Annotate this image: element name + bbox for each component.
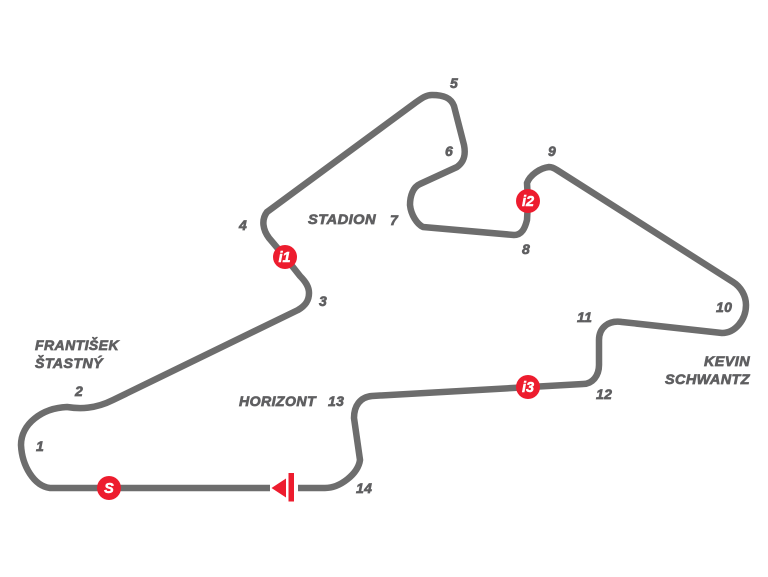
- corner name: Stadion: STADION: [308, 211, 377, 227]
- sector marker: i2: i2: [522, 194, 534, 210]
- corner name: Kevin Schwantz: SCHWANTZ: [665, 371, 750, 387]
- corner numbers: 14: [356, 480, 372, 496]
- corner numbers: 2: [74, 383, 83, 399]
- corner name: František Šťastný: FRANTIŠEK: [35, 336, 119, 353]
- corner numbers: [36, 75, 732, 496]
- corner numbers: 9: [548, 143, 556, 159]
- corner numbers: 5: [450, 75, 458, 91]
- corner numbers: 1: [36, 438, 44, 454]
- corner numbers: 12: [596, 386, 612, 402]
- corner numbers: 6: [445, 143, 453, 159]
- corner name: Kevin Schwantz: [665, 353, 750, 387]
- sector marker: start: [97, 476, 121, 500]
- corner name: František Šťastný: [35, 336, 119, 371]
- corner numbers: 13: [328, 393, 344, 409]
- sector marker: i2: [516, 189, 540, 213]
- sector marker: i3: [516, 375, 540, 399]
- track outline: [21, 95, 746, 488]
- corner numbers: 4: [238, 217, 247, 233]
- corner numbers: 10: [716, 299, 732, 315]
- sector marker: i1: [273, 245, 297, 269]
- corner name: Horizont: HORIZONT: [239, 393, 317, 409]
- corner name: František Šťastný: ŠTASTNÝ: [35, 354, 104, 371]
- corner numbers: 3: [319, 293, 327, 309]
- corner numbers: 8: [522, 241, 530, 257]
- finish line marker: [272, 473, 294, 502]
- corner name: Kevin Schwantz: KEVIN: [704, 353, 750, 369]
- sector marker: i1: i1: [278, 250, 291, 266]
- sector marker: start: S: [104, 481, 114, 497]
- corner numbers: 7: [390, 212, 399, 228]
- corner numbers: 11: [577, 309, 592, 325]
- sector marker: i3: i3: [522, 380, 534, 396]
